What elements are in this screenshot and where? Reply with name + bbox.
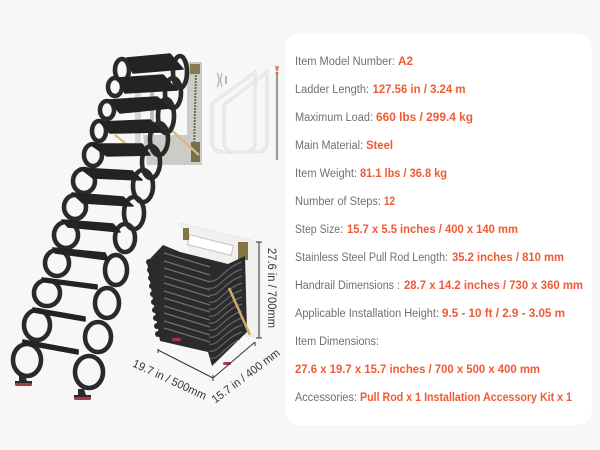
spec: model number: Item Model Number: bbox=[295, 56, 395, 68]
spec: item dimensions label: Item Dimensions: bbox=[295, 336, 379, 348]
spec: number of steps: 12 bbox=[384, 196, 395, 208]
spec: item weight bbox=[295, 168, 447, 180]
ladder: extended scissor steps bbox=[13, 54, 187, 400]
backing plate bbox=[180, 223, 260, 338]
spec: pull rod length: Stainless Steel Pull Rod Length: bbox=[295, 252, 448, 264]
folded stack body bbox=[147, 245, 247, 366]
spec: step size: Step Size: bbox=[295, 224, 343, 236]
spec: ladder length: Ladder Length: bbox=[295, 84, 369, 96]
accessory: pull rod bbox=[275, 66, 279, 160]
folded red feet bbox=[172, 338, 181, 341]
spec: handrail dimensions: 28.7 x 14.2 inches / 730 x 360 mm bbox=[404, 280, 583, 292]
spec: pull rod length: 35.2 inches / 810 mm bbox=[452, 252, 564, 264]
spec: maximum load bbox=[295, 112, 473, 124]
folded right curves bbox=[209, 262, 242, 358]
spec: main material: Main Material: bbox=[295, 140, 363, 152]
spec: number of steps: Number of Steps: bbox=[295, 196, 381, 208]
ladder feet bbox=[15, 376, 91, 400]
spec: pull rod length bbox=[295, 252, 564, 264]
gold support strut bbox=[115, 127, 199, 155]
right side rings bbox=[75, 56, 187, 388]
panel: specifications card bbox=[285, 34, 592, 425]
accessory: mounting hardware bbox=[217, 73, 226, 87]
spec: installation height bbox=[295, 308, 565, 320]
spec: step size: 15.7 x 5.5 inches / 400 x 140 mm bbox=[347, 224, 518, 236]
scalloped left edge bbox=[146, 259, 161, 337]
spec: maximum load: 660 lbs / 299.4 kg bbox=[376, 112, 473, 124]
spec: item weight: Item Weight: bbox=[295, 168, 357, 180]
spec: installation height: 9.5 - 10 ft / 2.9 - 3.05 m bbox=[442, 308, 565, 320]
spec: handrail dimensions: Handrail Dimensions : bbox=[295, 280, 400, 292]
spec: ladder length bbox=[295, 84, 466, 96]
spec: accessories: Accessories: bbox=[295, 392, 357, 404]
folded rungs bbox=[164, 253, 210, 342]
spec: accessories: Pull Rod x 1 Installation Accessory Kit x 1 bbox=[360, 392, 573, 404]
spec: ladder length: 127.56 in / 3.24 m bbox=[372, 84, 466, 96]
folded ladder bbox=[146, 223, 260, 366]
dimension label: width: 19.7 in / 500mm bbox=[130, 358, 208, 403]
spec: handrail dimensions bbox=[295, 280, 583, 292]
accessory: handrails bbox=[212, 72, 267, 152]
dimension lines bbox=[158, 242, 262, 381]
spec: installation height: Applicable Installation Height: bbox=[295, 308, 439, 320]
spec: main material: Steel bbox=[366, 140, 393, 152]
dimension label: depth: 15.7 in / 400 mm bbox=[210, 347, 283, 406]
panel: wall mounting plate bbox=[135, 62, 202, 165]
spec: model number: A2 bbox=[398, 56, 413, 68]
spec: item weight: 81.1 lbs / 36.8 kg bbox=[360, 168, 447, 180]
step treads bbox=[23, 54, 183, 354]
dimension label: height: 27.6 in / 700mm bbox=[265, 248, 277, 328]
folded gold strut bbox=[229, 288, 250, 335]
spec: maximum load: Maximum Load: bbox=[295, 112, 373, 124]
spec: item dimensions value: 27.6 x 19.7 x 15.7 inches / 700 x 500 x 400 mm bbox=[295, 364, 540, 376]
left side rings bbox=[13, 59, 129, 376]
